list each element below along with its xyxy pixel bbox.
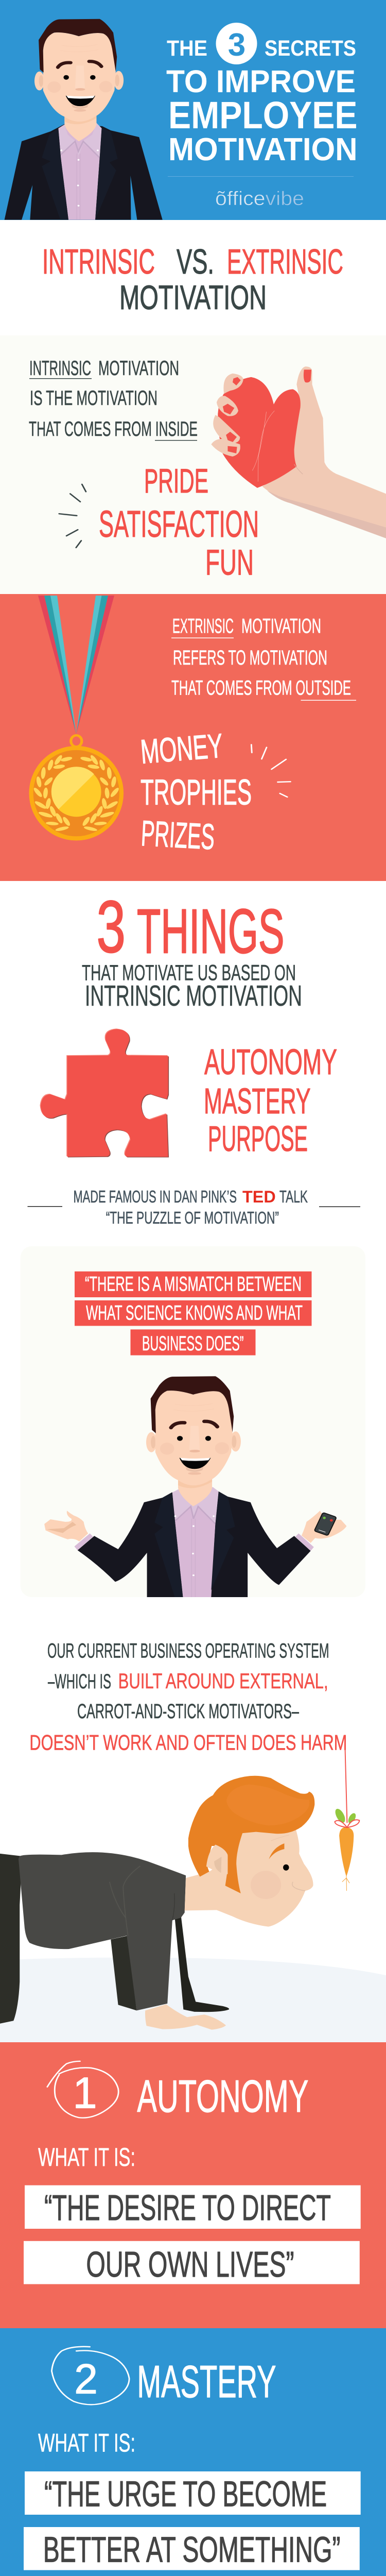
icon: burst lines [59,484,86,548]
panel: extrinsic motivation [0,594,386,881]
illustration: man shrugging with phone [44,1376,346,1597]
illustration: hand holding heart [211,366,386,538]
icon: puzzle piece [40,1028,169,1158]
heading: intrinsic vs extrinsic motivation: INTRINSIC [42,242,155,281]
title: THE [167,36,207,61]
title: SECRETS [265,36,356,61]
list: money trophies prizes [139,726,252,857]
callout: autonomy quote: OUR OWN LIVES” [86,2244,294,2284]
list: pride satisfaction fun: FUN [205,542,254,582]
text: business operating system statement: –WHICH IS [48,1670,111,1693]
callout: quote: BUSINESS DOES” [142,1332,244,1355]
callout: quote [75,1272,312,1355]
label: what it is: WHAT IT IS: [38,2143,135,2172]
list: money trophies prizes: MONEY [139,726,224,771]
list: autonomy mastery purpose: MASTERY [204,1081,311,1121]
panel: intrinsic motivation [0,335,386,595]
list: pride satisfaction fun: PRIDE [144,462,208,500]
text: intrinsic definition: IS THE MOTIVATION [30,387,157,410]
list: money trophies prizes: TROPHIES [141,772,252,812]
text: ted talk credit: TED [242,1188,276,1206]
callout: mastery quote [24,2471,361,2570]
text: extrinsic definition: EXTRINSIC [172,615,234,638]
text: ted talk credit [28,1188,360,1228]
label: what it is: WHAT IT IS: [38,2428,135,2457]
panel: mastery [0,2328,386,2576]
illustration: smiling man in jacket [5,19,163,220]
heading: intrinsic vs extrinsic motivation: VS. [177,242,214,281]
icon: burst lines [251,744,290,797]
text: ted talk credit: “THE PUZZLE OF MOTIVATION” [106,1209,279,1228]
title: TO IMPROVE [166,64,356,99]
panel: autonomy [0,2042,386,2328]
illustration: gold medal [29,596,124,840]
list: pride satisfaction fun: SATISFACTION [99,504,259,545]
callout: autonomy quote [24,2185,361,2284]
heading: 3 things: THINGS [137,896,284,966]
text: intrinsic definition [29,357,198,441]
icon: carrot on string [334,1750,359,1891]
list: autonomy mastery purpose: PURPOSE [208,1118,308,1159]
text: ted talk credit: MADE FAMOUS IN DAN PINK’S [73,1188,237,1207]
icon: hand-drawn circle 1 [47,2061,118,2118]
title [166,23,357,167]
illustration: man crawling after carrot [0,1750,386,2042]
list: pride satisfaction fun [99,462,259,582]
heading: 3 things: 3 [97,886,126,968]
heading: intrinsic vs extrinsic motivation: MOTIVATION [119,278,267,316]
icon: hand-drawn circle 1: 1 [73,2069,97,2117]
panel: quote card [21,1246,365,1597]
logo: officevibe: õfficevibe [215,188,304,210]
icon: hand-drawn circle 2: 2 [74,2356,98,2403]
text: intrinsic definition: MOTIVATION [98,357,179,380]
title: 3 [228,27,245,63]
text: business operating system statement [29,1639,347,1755]
icon: hand-drawn circle 2 [51,2347,129,2404]
heading: 3 things [82,886,302,1012]
list: money trophies prizes: PRIZES [140,813,216,857]
heading: mastery: MASTERY [137,2356,276,2407]
text: extrinsic definition [171,615,356,701]
panel: header [0,0,386,220]
title: MOTIVATION [168,131,357,167]
text: intrinsic definition: INTRINSIC [29,357,91,380]
title: EMPLOYEE [168,94,357,137]
heading: intrinsic vs extrinsic motivation [42,242,343,316]
text: extrinsic definition: MOTIVATION [241,615,321,638]
text: intrinsic definition: THAT COMES FROM INSIDE [29,418,198,440]
text: ted talk credit: TALK [279,1188,308,1207]
list: autonomy mastery purpose [204,1042,337,1159]
